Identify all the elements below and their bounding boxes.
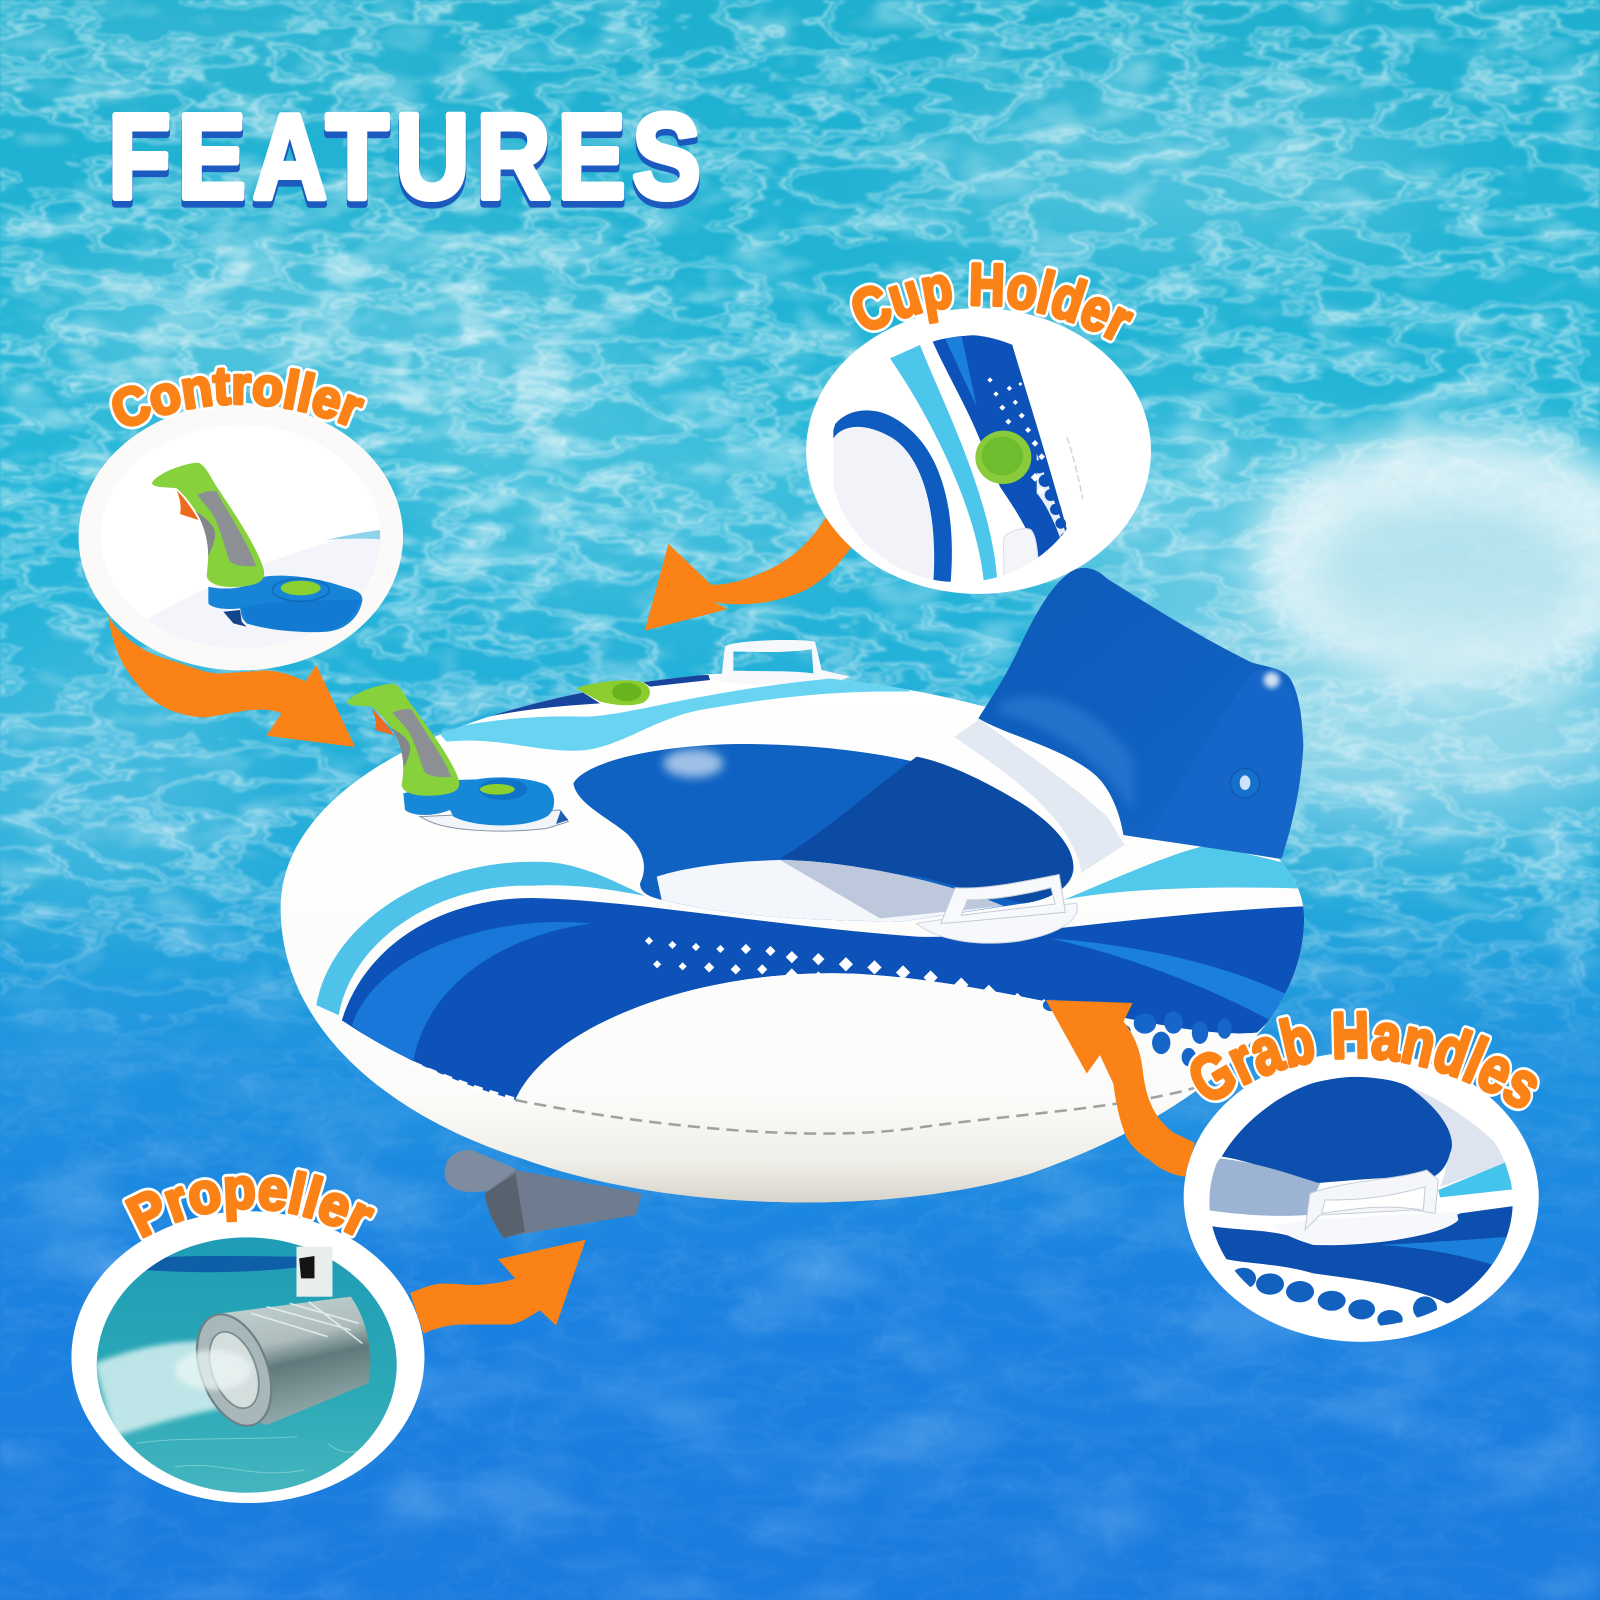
inset seat [833,427,934,580]
callout label: Propeller: Propeller [118,1157,383,1250]
inset spray [175,1350,251,1390]
callout arrow: propeller [410,1240,586,1334]
inset lower band [1210,1206,1513,1303]
float body [281,674,1304,1202]
inset white dot strip [1037,453,1073,562]
inset handle plate [1273,1212,1458,1245]
inset dark seat [1222,1077,1452,1183]
callout: cup holder [806,308,1151,594]
cup holder frame [806,308,1151,594]
front grab handle [916,874,1077,943]
callout label: Cup Holder: Cup Holder [852,262,1134,341]
callout arrow: controller [108,616,355,747]
inset water ripples [137,1437,378,1473]
lower white chamber [515,973,1257,1206]
controller frame [79,403,403,670]
callout label: Cup Holder: Cup Holder [850,259,1137,344]
inset handle loop [1305,1170,1438,1230]
white shadowed ring by backrest [954,719,1124,872]
inset water [97,1237,397,1493]
inflatable float [281,568,1311,1206]
seat hole [573,744,1073,922]
callout arrow: grab handles [1046,1000,1195,1177]
callout: controller [79,403,403,670]
top handle [705,640,850,684]
inset green cup [975,431,1031,484]
seat floor [657,860,1003,922]
inset cyan stripe [1438,1163,1513,1197]
seam [515,1082,1214,1134]
left cyan stripe [316,862,645,1015]
backrest soft light [997,696,1133,813]
propeller frame [71,1211,424,1503]
valve [1230,769,1260,798]
callout label: Grab Handles: Grab Handles [1190,1010,1538,1108]
callout arrow: cup holder [645,507,852,631]
inset white squares [987,377,1045,495]
callout label: Propeller: Propeller [122,1167,378,1240]
white dots [645,937,1051,1013]
title: FEATURES: FEATURES [108,95,708,230]
top swooshes and seat [433,675,1073,922]
inset dark float edge [137,1256,305,1272]
callout label: Grab Handles: Grab Handles [1188,1008,1540,1112]
inset cylinder ripples [251,1302,362,1343]
inset post [296,1247,332,1297]
inset water jet [94,1341,259,1437]
float graphics [316,675,1311,1206]
inset dots [1033,460,1073,555]
joystick on float [347,684,459,796]
inset pale fold [1408,1087,1513,1187]
backrest glint [1264,672,1280,688]
medium blue stripes [352,922,592,1061]
right cyan stripe [1063,845,1306,900]
backrest [978,568,1303,858]
seat shaded half [780,757,1073,903]
propeller under the float [445,1150,642,1238]
inset cylinder face [184,1307,285,1433]
inset scalloped edge [1067,437,1088,533]
grab handle frame [1184,1052,1539,1342]
cup holder on float [576,680,650,705]
inset handle [1003,529,1038,580]
controller joystick handle [152,463,264,587]
controller joystick base [208,576,362,632]
callout: propeller [71,1211,424,1503]
title: FEATURES: FEATURES [108,89,708,224]
seat-side joystick base [403,777,568,831]
inset cylinder [200,1297,370,1425]
foam splash [1061,426,1600,827]
inset dots [1231,1268,1437,1329]
callout label: Controller: Controller [109,364,368,430]
inset grey-blue seat [1207,1158,1320,1216]
main blue band [342,898,1311,1100]
inset cyan stripe [890,345,997,583]
backrest side face [1147,670,1303,858]
callout label: Controller: Controller [112,368,365,427]
callout: grab handles [1184,1052,1539,1342]
seat highlight [663,749,723,777]
inset blue band [933,335,1073,570]
blue dots [1043,999,1232,1066]
